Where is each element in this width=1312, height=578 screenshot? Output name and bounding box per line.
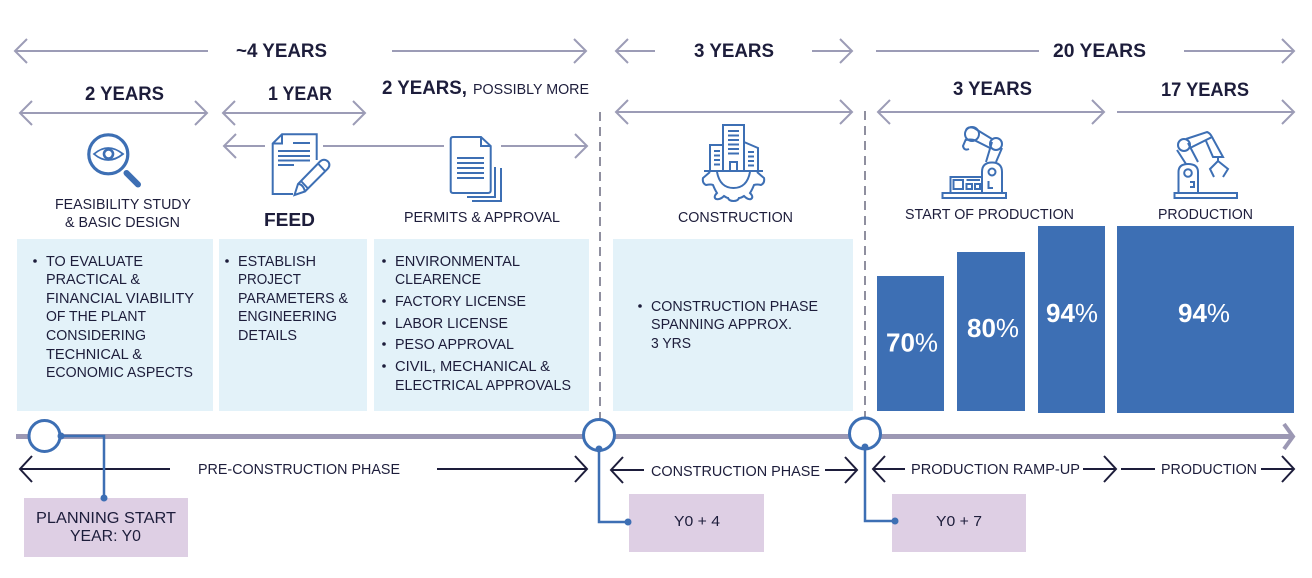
label: pre-construction phase: PRE-CONSTRUCTION PHASE [198,462,400,478]
panel: permits details: FACTORY LICENSE [395,294,526,310]
label: production: PRODUCTION [1158,207,1253,223]
heading: 17 years: 17 YEARS [1161,80,1249,101]
label: start of production: START OF PRODUCTION [905,207,1074,223]
callout: planning start: PLANNING START [36,510,176,527]
arrow: 1 year [223,101,365,125]
icon: robot arm with control unit [942,127,1006,198]
heading: 3 years ramp-up: 3 YEARS [953,79,1032,100]
arrow: production ramp-up [873,456,1116,482]
callout: Y0 + 7: Y0 + 7 [936,513,982,530]
arrow: construction phase [611,457,857,483]
panel: feed details: PROJECT [238,272,301,288]
icon: document with pencil [273,134,329,195]
arrow: production phase [1121,456,1294,482]
bar: 70%: 70% [886,328,938,358]
panel: feed details: ENGINEERING [238,309,337,325]
heading: 2 years possibly more [382,78,589,99]
milestone: year 4 [584,420,632,526]
arrow: pre-construction phase [20,456,587,482]
icon: robot arm gripper [1174,132,1237,198]
label: permits and approval: PERMITS & APPROVAL [404,210,560,226]
panel: feasibility details: OF THE PLANT [46,309,146,325]
label: production phase: PRODUCTION [1161,462,1257,478]
panel: feasibility details [17,239,213,411]
panel: permits details: PESO APPROVAL [395,337,514,353]
arrow: ~4 years span [15,39,586,63]
label: feasibility study: FEASIBILITY STUDY [55,197,191,213]
heading: 2 years possibly more: 2 YEARS, [382,78,467,99]
arrow: ramp-up 3 years [878,100,1104,124]
panel: feasibility details: ECONOMIC ASPECTS [46,365,193,381]
heading: 2 years possibly more: POSSIBLY MORE [473,82,589,98]
icon: stacked permits [451,137,501,201]
heading: 20 years: 20 YEARS [1053,41,1146,62]
arrow: construction 3 years [616,100,852,124]
panel: permits details: LABOR LICENSE [395,316,508,332]
panel: feasibility details: FINANCIAL VIABILITY [46,291,194,307]
panel: construction details: SPANNING APPROX. [651,317,792,333]
panel: feed details: PARAMETERS & [238,291,348,307]
label: feasibility study [55,197,191,231]
timeline [16,424,1293,449]
arrow: feed to permits [224,134,587,158]
heading: 1 year feed: 1 YEAR [268,84,332,105]
panel: construction details [613,239,853,411]
callout: Y0 + 4: Y0 + 4 [674,513,720,530]
panel: feed details [219,239,367,411]
panel: feasibility details: TECHNICAL & [46,347,142,363]
heading: 3 years construction: 3 YEARS [694,41,774,62]
heading: 2 years feasibility: 2 YEARS [85,84,164,105]
arrow: 20 years span [876,39,1294,63]
bar: 94% production [1117,226,1294,413]
bar: 80% [957,252,1025,411]
panel: construction details: CONSTRUCTION PHASE [651,299,818,315]
panel: construction details: 3 YRS [651,336,691,352]
callout: planning start [24,498,188,557]
panel: permits details: ENVIRONMENTAL [395,254,520,270]
bar: 94% production: 94% [1178,298,1230,328]
panel: feed details: ESTABLISH [238,254,316,270]
heading: ~4 years: ~4 YEARS [236,41,327,62]
panel: permits details: ELECTRICAL APPROVALS [395,378,571,394]
label: construction: CONSTRUCTION [678,210,793,226]
phase dividers [600,111,865,420]
panel: permits details: CLEARENCE [395,272,481,288]
label: construction phase: CONSTRUCTION PHASE [651,464,820,480]
callout: Y0 + 7 [892,494,1026,552]
label: feed: FEED [264,209,315,230]
bar: 80%: 80% [967,313,1019,343]
bar: 94%: 94% [1046,298,1098,328]
bar: 94% [1038,226,1105,413]
icon: buildings on gear [703,125,764,201]
panel: feasibility details: TO EVALUATE [46,254,143,270]
icon: magnifier with eye [89,135,138,184]
label: feasibility study: & BASIC DESIGN [65,215,180,231]
panel: feasibility details: CONSIDERING [46,328,146,344]
callout: Y0 + 4 [629,494,764,552]
arrow: 3 years span [616,39,852,63]
label: production ramp-up: PRODUCTION RAMP-UP [911,462,1080,478]
panel: feasibility details: PRACTICAL & [46,272,140,288]
panel: permits details: CIVIL, MECHANICAL & [395,359,550,375]
arrow: production 17 years [1117,100,1294,124]
milestone: planning start [29,420,108,502]
panel: permits details [374,239,589,411]
arrow: 2 years [20,101,207,125]
milestone: year 7 [850,418,898,524]
bar: 70% [877,276,944,411]
panel: feed details: DETAILS [238,328,297,344]
callout: planning start: YEAR: Y0 [70,528,141,545]
